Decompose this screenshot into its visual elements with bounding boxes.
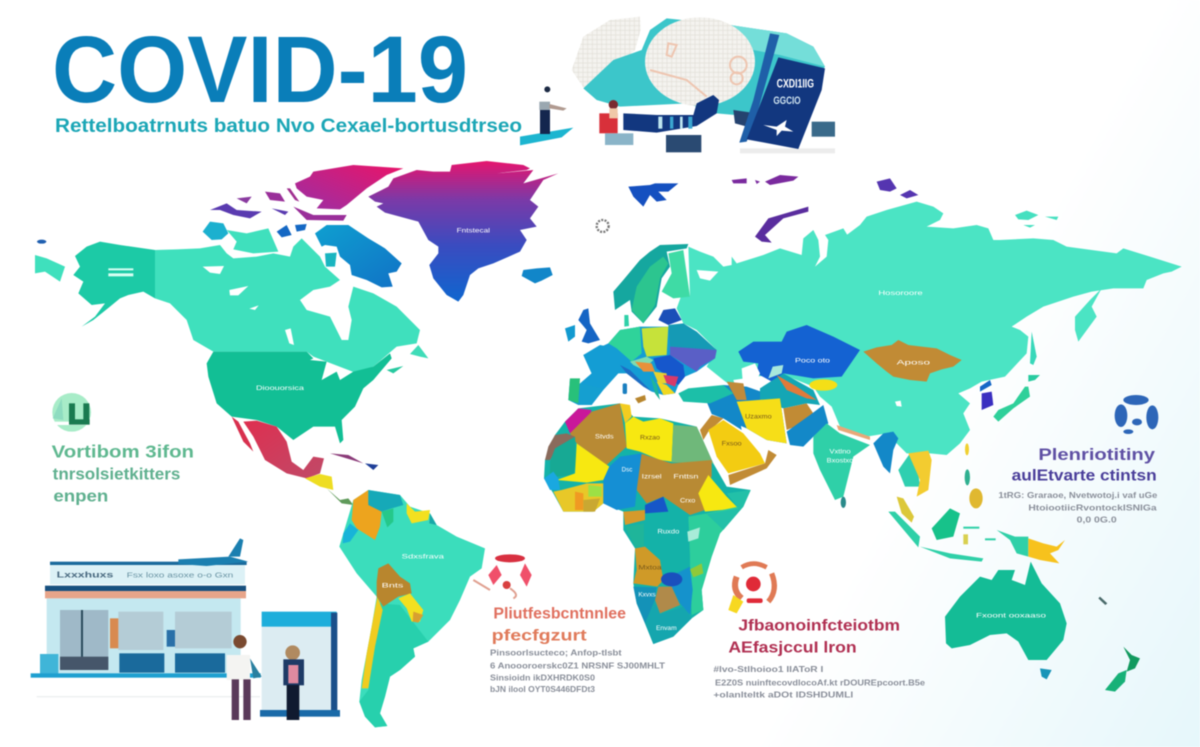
Morocco <box>565 408 592 433</box>
Greenland: Fntstecal <box>457 228 491 235</box>
Uzbekistan <box>777 375 817 400</box>
Argentina <box>359 603 428 727</box>
person on board <box>520 86 573 145</box>
passport <box>747 57 825 149</box>
airplane on roof <box>178 538 248 566</box>
New Siberian islands <box>1015 211 1058 228</box>
Greenland <box>368 161 558 302</box>
Mauritania <box>550 437 577 477</box>
body text <box>998 490 1158 524</box>
Saudi Arabia: Fxsoo <box>722 441 742 448</box>
illustration: airport shop with travellers <box>31 538 340 720</box>
body text: E2Z0S nuinftecovdlocoAf.kt rDOUREpcoort.B5e <box>715 677 925 687</box>
Sudan and Chad: Crxo <box>680 498 696 505</box>
Belarus <box>668 323 717 350</box>
Java <box>920 547 983 562</box>
ground line <box>37 696 260 697</box>
Baja <box>232 417 253 452</box>
passport: CXDI1IIG <box>777 76 814 90</box>
Hokkaido <box>1028 375 1040 382</box>
North America <box>35 165 428 505</box>
Pakistan <box>787 405 828 447</box>
Baffin island <box>315 225 402 287</box>
France <box>578 345 625 390</box>
luggage <box>812 122 835 137</box>
Oceania <box>945 530 1140 692</box>
United States: Dioouorsica <box>256 385 304 392</box>
Lake region <box>690 563 703 577</box>
Ireland <box>565 325 575 342</box>
Sudan and Chad: Izrsel <box>642 473 662 480</box>
main globe <box>645 17 755 106</box>
Caucasus <box>727 382 747 400</box>
Tunisia <box>620 403 632 423</box>
Myanmar <box>873 432 898 473</box>
light teal top right <box>730 25 825 67</box>
left globe <box>572 17 641 87</box>
body text: Sinsioidn ikDXHRDK0S0 <box>490 672 595 682</box>
icon: orange target <box>728 564 774 613</box>
Sumatra <box>888 512 920 547</box>
Severnaya Zemlya <box>877 178 918 198</box>
Iran: Uzaxmo <box>745 413 772 420</box>
Senegal <box>544 472 560 490</box>
Angola: Mxtoa <box>638 564 662 571</box>
Southampton island <box>325 253 337 267</box>
Aral sea <box>768 365 783 378</box>
Namibia <box>633 587 657 623</box>
South Sudan <box>645 497 668 513</box>
title: COVID-19 <box>52 17 468 123</box>
Mongolia: Aposo <box>897 359 931 366</box>
Oman and Yemen <box>728 450 777 485</box>
Mozambique <box>672 567 693 615</box>
callout: right <box>998 395 1158 524</box>
Chile <box>362 597 383 688</box>
passport: GGCIO <box>773 95 801 107</box>
South Africa: Envam <box>656 625 677 632</box>
Zambia <box>661 572 682 586</box>
hand <box>733 110 757 128</box>
Norway and Sweden <box>613 244 688 323</box>
Japan <box>993 387 1030 422</box>
Australia <box>945 562 1067 660</box>
world map <box>35 161 1182 727</box>
Namibia: Kxvxs <box>638 592 656 599</box>
suitcase <box>666 135 701 152</box>
Portugal <box>568 378 580 403</box>
Iceland <box>522 267 553 283</box>
West Africa coast <box>553 483 603 512</box>
Afghanistan <box>783 403 813 430</box>
Svalbard <box>628 183 678 207</box>
heading line two: aulEtvarte ctintsn <box>1012 468 1157 485</box>
Scandinavia <box>613 244 718 323</box>
Hispaniola <box>365 463 378 470</box>
Egypt <box>672 425 713 463</box>
Kazakhstan: Poco oto <box>795 358 830 365</box>
Libya: Rxzao <box>640 434 660 441</box>
heading line two: AEfasjccuI lron <box>728 639 857 656</box>
heading line three: enpen <box>53 487 108 506</box>
Syria and Iraq <box>712 402 742 430</box>
Malay peninsula <box>897 497 914 523</box>
islet <box>37 240 46 244</box>
India <box>813 423 870 500</box>
Western Sahara <box>545 433 575 460</box>
body text <box>490 648 666 694</box>
Kazakhstan <box>738 325 860 383</box>
heading: Pliutfesbcntnnlee <box>493 605 626 622</box>
shadow <box>740 148 835 153</box>
heading line two: pfecfgzurt <box>492 628 587 645</box>
Arctic fragments <box>277 224 307 237</box>
Himalaya strip <box>837 425 870 440</box>
Europe, Africa, Middle East and South Asia <box>544 308 996 644</box>
icon: green globe <box>52 393 91 432</box>
Uruguay fragment <box>413 612 423 623</box>
Central America <box>305 474 333 490</box>
heading: Vortibom 3ifon <box>52 441 194 461</box>
body text: HtoiootiicRvontockISNIGa <box>1028 503 1157 513</box>
Mali <box>557 443 609 483</box>
icon: blue emblem <box>1115 395 1158 434</box>
China lake <box>895 401 902 407</box>
Arctic archipelago <box>210 188 347 221</box>
callout: left <box>52 393 194 506</box>
Romania <box>653 355 685 385</box>
aircraft wing <box>623 95 719 133</box>
Alaska <box>73 242 155 327</box>
Guyana border <box>382 508 393 527</box>
Saudi Arabia <box>708 420 765 473</box>
Europe base <box>568 323 717 405</box>
Australia: Fxoont ooxaaso <box>976 613 1046 620</box>
Cameroon <box>623 510 645 525</box>
Balkans <box>635 362 678 400</box>
callout: centre right <box>713 564 925 700</box>
South Korea <box>982 392 993 410</box>
Russia and China: Hosoroore <box>878 290 923 297</box>
Mexico <box>243 421 324 478</box>
Germany <box>608 327 642 362</box>
Spain <box>578 383 603 405</box>
Bolivia: Bnts <box>382 582 404 589</box>
New Caledonia <box>1098 597 1107 605</box>
Guyana <box>407 503 430 523</box>
Sardinia <box>623 383 627 394</box>
body text: 0,0 0G.0 <box>1077 514 1117 524</box>
Russia and east Asia <box>677 175 1182 455</box>
shop facade <box>47 598 241 674</box>
Algeria: Stvds <box>595 433 614 440</box>
traveller with red coat <box>599 100 633 145</box>
person two <box>283 645 304 720</box>
Niger: Dsc <box>622 467 633 474</box>
heading: Jfbaonoinfcteiotbm <box>738 618 900 635</box>
French Guiana <box>429 513 437 525</box>
White sea <box>697 270 718 281</box>
Congo: Ruxdo <box>657 528 680 535</box>
Gabon <box>625 523 644 547</box>
counters <box>119 653 225 673</box>
United Kingdom <box>578 308 600 343</box>
globe map marks <box>650 43 747 97</box>
Brazil and base <box>339 490 485 727</box>
New Zealand south <box>1105 670 1127 692</box>
Tasmania <box>1040 668 1052 679</box>
Niger <box>603 453 642 510</box>
Finland <box>662 250 690 298</box>
Zimbabwe <box>655 587 680 613</box>
subtitle: Rettelboatrnuts batuo Nvo Cexael-bortusdtrseo <box>55 116 522 137</box>
Algeria <box>570 403 627 465</box>
India: Vxtlno <box>829 448 851 455</box>
body text <box>713 664 925 700</box>
Papua New Guinea <box>1028 538 1065 563</box>
Nova Scotia <box>387 366 403 373</box>
sign board: Lxxxhuxs <box>57 570 114 579</box>
kiosk <box>260 612 340 717</box>
Caribbean <box>330 453 363 463</box>
Bolivia <box>377 563 412 607</box>
Ukraine <box>670 347 717 372</box>
Brazil and base: Sdxsfrava <box>402 554 444 561</box>
Kamchatka <box>1075 288 1102 342</box>
windows <box>60 610 232 670</box>
Thailand <box>898 453 920 487</box>
Angola <box>633 547 663 587</box>
body text: Pinsoorlsucteco; Anfop-tlsbt <box>490 648 622 658</box>
Congo <box>645 517 700 572</box>
isthmus <box>327 488 353 505</box>
Libya <box>625 417 673 462</box>
body text: 1tRG: Graraoe, Nvetwotoj.i vaf uGe <box>998 490 1158 500</box>
heading line two: tnrsolsietkitters <box>53 464 180 483</box>
Kyrgyzstan <box>809 379 837 391</box>
Denmark <box>624 315 629 327</box>
Russia and China <box>677 202 1182 455</box>
Sakhalin <box>1030 332 1037 365</box>
Ellesmere island <box>295 165 403 209</box>
India: Bxostxo <box>827 457 854 464</box>
Jordan <box>700 415 723 440</box>
Indonesian islands <box>963 527 996 544</box>
Mongolia <box>863 340 962 382</box>
person one <box>227 635 262 720</box>
New Guinea west <box>997 530 1028 557</box>
Vietnam <box>908 451 932 497</box>
Sudan and Chad: Fnttsn <box>673 473 699 480</box>
Austria <box>630 357 653 370</box>
Ecuador <box>343 523 358 543</box>
Central Asia <box>760 373 820 408</box>
Chukotka fragment <box>35 255 65 282</box>
platform <box>31 654 261 678</box>
Franz Josef Land <box>732 175 798 185</box>
Colombia <box>352 490 382 540</box>
Novaya Zemlya <box>755 207 808 243</box>
Newfoundland <box>410 345 428 358</box>
United States <box>207 352 392 443</box>
passport spine <box>739 33 779 143</box>
Africa base <box>544 403 751 644</box>
body text: #lvo-Stlhoioo1 IIAToR I <box>713 664 823 674</box>
illustration: globe, passport and travellers <box>520 17 835 153</box>
Paraguay <box>398 593 423 622</box>
South Africa <box>645 602 692 644</box>
Somalia <box>707 490 751 530</box>
Turkey <box>678 385 733 403</box>
Caspian sea <box>742 363 760 402</box>
East Africa <box>688 490 750 615</box>
Iran <box>737 398 787 443</box>
North Korea <box>980 380 992 392</box>
body text: +olanlteltk aDOt lDSHDUMLl <box>713 690 853 700</box>
heading: Plenriotitiny <box>1038 445 1156 464</box>
Victoria island <box>227 228 278 253</box>
sign board <box>50 562 247 584</box>
icon: red emblem <box>473 554 532 598</box>
body text: 6 Anoooroerskc0Z1 NRSNF SJ00MHLT <box>490 661 666 671</box>
Canadian lakes <box>203 266 294 345</box>
body text: bJN ilooI OYT0S446DFDt3 <box>490 684 595 694</box>
Ethiopia <box>698 475 738 512</box>
awning <box>45 586 246 598</box>
Banks island <box>203 222 228 240</box>
Canada <box>155 238 420 373</box>
Borneo <box>932 508 960 540</box>
callout: centre left <box>473 554 666 694</box>
Greenland and north Atlantic <box>368 161 678 302</box>
New Zealand north <box>1123 647 1140 672</box>
Sweden inner <box>632 257 668 323</box>
Italy <box>620 365 652 392</box>
Philippines <box>965 469 983 508</box>
Venezuela <box>368 490 403 512</box>
Sudan and Chad <box>637 453 712 515</box>
Middle East base <box>707 385 787 443</box>
Poland <box>642 327 668 357</box>
Sri Lanka <box>841 497 846 508</box>
teal backdrop <box>583 18 825 117</box>
Baltics <box>658 308 682 325</box>
marker icon <box>597 220 609 232</box>
sign board: Fsx loxo asoxe o-o Gxn <box>127 570 233 579</box>
Sicily <box>635 395 646 403</box>
Taiwan <box>965 443 969 455</box>
South America <box>339 490 485 727</box>
